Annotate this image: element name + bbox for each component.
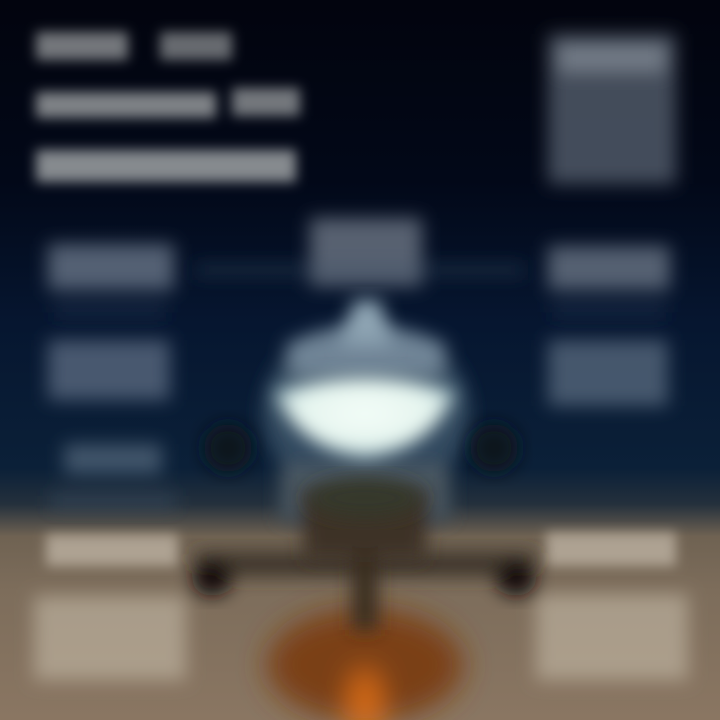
panel: left lower text bbox=[34, 596, 186, 680]
panel: center top label bbox=[195, 218, 525, 286]
panel: right lower text bbox=[536, 594, 688, 680]
panel: right text 1 bbox=[548, 246, 670, 316]
tail fin bbox=[340, 300, 392, 345]
fuselage bbox=[262, 324, 470, 630]
cockpit windscreen bbox=[274, 377, 456, 458]
panel: left text 2 bbox=[48, 340, 170, 400]
right engine bbox=[470, 424, 518, 472]
panel: right lower heading bbox=[546, 532, 676, 566]
illustration: aircraft front view bbox=[192, 300, 536, 720]
left engine bbox=[204, 424, 252, 472]
panel: left text 3 bbox=[50, 444, 176, 508]
panel: left lower heading bbox=[46, 534, 178, 566]
panel: left text 1 bbox=[48, 244, 174, 316]
title block bbox=[36, 32, 300, 182]
exhaust flame bbox=[267, 609, 463, 720]
panel: top right text bbox=[548, 34, 676, 184]
nose shadow bbox=[307, 478, 423, 518]
panel: right text 2 bbox=[548, 340, 668, 406]
wings bbox=[192, 552, 536, 596]
